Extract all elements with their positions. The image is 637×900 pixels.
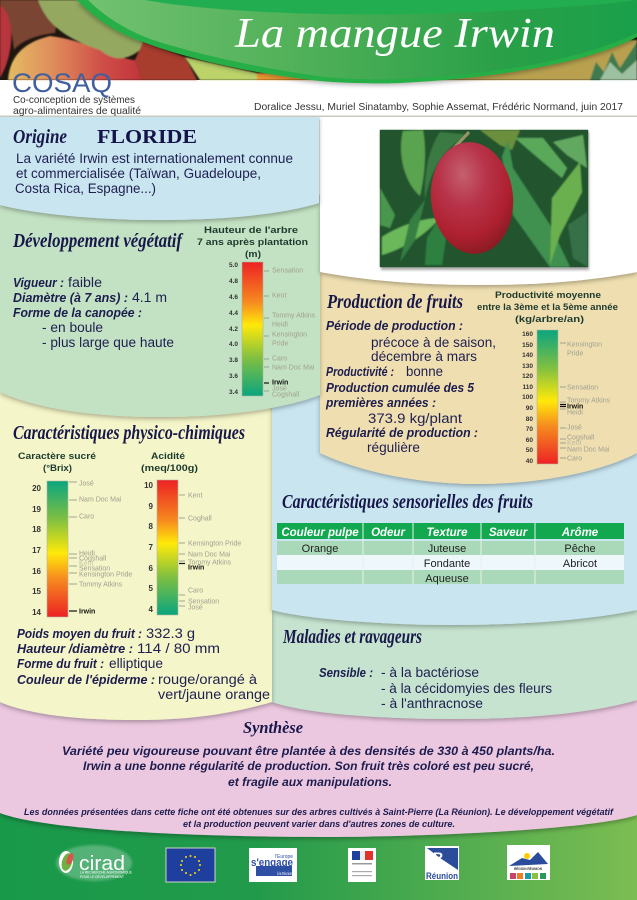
chart: hauteur de l'arbre: (m) [245, 249, 261, 260]
text: disease sensitivity: - à la cécidomyies des fleurs [381, 681, 552, 696]
chart: productivité moyenne: Pride [567, 350, 583, 358]
text: vegetative traits: Forme de la canopée : [13, 306, 142, 320]
chart: acidité: Acidité [151, 451, 185, 462]
chart: hauteur de l'arbre: Hauteur de l'arbre [204, 225, 298, 236]
chart: acidité: 8 [149, 522, 154, 531]
logo: COSAQ: COSAQ [12, 68, 112, 98]
chart: productivité moyenne: Irwin [567, 404, 583, 410]
chart: hauteur de l'arbre: 4.8 [229, 278, 238, 285]
chart: productivité moyenne: 90 [526, 405, 533, 412]
chart: productivité moyenne: Heidi [567, 410, 583, 416]
header fruit photo [0, 0, 637, 80]
chart: hauteur de l'arbre: 3.6 [229, 373, 238, 380]
chart: productivité moyenne: 150 [522, 342, 533, 349]
panel: synthèse [0, 690, 637, 837]
text: production details: bonne [406, 364, 443, 379]
chart: productivité moyenne: 70 [526, 426, 533, 433]
panel: caractéristiques physico-chimiques [0, 385, 272, 720]
chart: hauteur de l'arbre: Kent [272, 292, 286, 300]
table: sensory traits: Aqueuse [425, 573, 469, 585]
text: disease sensitivity: Sensible : [319, 666, 373, 680]
chart: productivité moyenne: Kensington [567, 342, 602, 348]
text: data note: Les données présentées dans cette fiche ont été obtenues sur des arbres cultivés à Saint-Pierre (La Réunion). Le développement végétatif [24, 807, 614, 817]
footer band [0, 790, 637, 900]
heading: Synthèse: Synthèse [243, 718, 303, 737]
panel: caractéristiques sensorielles [272, 395, 637, 625]
chart: caractère sucré: Kent [79, 560, 93, 568]
text: fruit characteristics: Poids moyen du fruit : [17, 627, 142, 641]
text: origin description: La variété Irwin est internationalement connue [16, 151, 293, 166]
chart: hauteur de l'arbre: Caro [272, 356, 287, 362]
text: production details: Productivité : [326, 365, 394, 379]
text: vegetative traits: - plus large que haute [42, 335, 174, 350]
text: production details: 373.9 kg/plant [368, 411, 462, 426]
chart: caractère sucré: Caractère sucré [18, 451, 96, 462]
text: fruit characteristics: Forme du fruit : [17, 657, 104, 671]
text: synthesis summary: Variété peu vigoureuse pouvant être plantée à des densités de 330 à 450 plants/ha. [62, 744, 555, 758]
logo: cirad: cirad [79, 853, 125, 875]
chart: caractère sucré: 16 [32, 567, 42, 576]
chart: caractère sucré: José [79, 480, 94, 488]
chart: acidité: (meq/100g) [141, 463, 198, 474]
chart: hauteur de l'arbre: Sensation [272, 268, 303, 274]
panel: photo background [320, 116, 637, 285]
chart: productivité moyenne: 80 [526, 416, 533, 423]
logo: l'Europe s'engage: l'Europe [275, 854, 293, 860]
heading: Maladies et ravageurs: Maladies et ravageurs [282, 626, 422, 648]
table: sensory traits: Pêche [564, 543, 596, 555]
chart: acidité: 10 [144, 481, 154, 490]
text: origin description [15, 151, 293, 196]
table: sensory traits: Texture [426, 527, 468, 539]
chart: hauteur de l'arbre: 3.8 [229, 357, 238, 364]
chart: productivité moyenne: 60 [526, 437, 533, 444]
chart: productivité moyenne: Tommy Atkins [567, 398, 611, 404]
logo: European Union flag [166, 848, 215, 882]
text: production details: précoce à de saison, [371, 335, 496, 350]
chart: caractère sucré: 20 [32, 484, 42, 493]
table: sensory traits [277, 523, 624, 585]
chart: productivité moyenne: Productivité moyenne [495, 290, 601, 301]
chart: productivité moyenne: Nam Doc Mai [567, 446, 610, 454]
chart: caractère sucré: Nam Doc Mai [79, 496, 122, 504]
chart: caractère sucré: 18 [32, 525, 42, 534]
table: sensory traits: Juteuse [428, 543, 466, 555]
table: sensory traits: Couleur pulpe [281, 527, 359, 539]
chart: productivité moyenne: Sensation [567, 384, 598, 392]
chart: productivité moyenne: 140 [522, 352, 533, 359]
chart: hauteur de l'arbre: Pride [272, 340, 288, 348]
chart: hauteur de l'arbre: 4.2 [229, 326, 238, 333]
text: fruit characteristics: 114 / 80 mm [137, 641, 220, 656]
chart: acidité: Kent [188, 492, 202, 500]
text: fruit characteristics: Couleur de l'épiderme : [17, 673, 155, 687]
panel: production de fruits [320, 260, 637, 484]
chart: acidité: 7 [149, 543, 154, 552]
chart: hauteur de l'arbre: 3.4 [229, 389, 238, 396]
chart: caractère sucré: Sensation [79, 566, 110, 572]
logo: cirad: POUR LE DÉVELOPPEMENT [80, 874, 125, 879]
chart: productivité moyenne: 50 [526, 447, 533, 454]
chart: caractère sucré: Heidi [79, 550, 95, 558]
heading: Développement végétatif: Développement végétatif [12, 230, 184, 252]
text: fruit characteristics: vert/jaune orange [158, 687, 270, 702]
chart: productivité moyenne: 130 [522, 363, 533, 370]
chart: hauteur de l'arbre: Irwin [272, 380, 288, 386]
text: disease sensitivity: - à l'anthracnose [381, 696, 483, 711]
text: vegetative traits: - en boule [42, 320, 103, 335]
logo: département de La Réunion [425, 846, 459, 881]
text: production details: Production cumulée des 5 [326, 381, 475, 395]
text: vegetative traits: Vigueur : [13, 276, 64, 290]
chart: caractère sucré: Irwin [79, 608, 95, 616]
chart: caractère sucré: Kensington Pride [79, 572, 132, 578]
text: fruit characteristics: rouge/orangé à [158, 672, 258, 687]
chart: caractère sucré [18, 451, 132, 617]
heading: Caractéristiques physico-chimiques: Caractéristiques physico-chimiques [13, 422, 245, 444]
chart: acidité [141, 451, 241, 615]
chart: hauteur de l'arbre: Heidi [272, 322, 288, 328]
text: fruit characteristics: Hauteur /diamètre : [17, 642, 133, 656]
chart: hauteur de l'arbre: Cogshall [272, 392, 300, 398]
text: data note: et la production peuvent varier dans d'autres zones de culture. [183, 819, 455, 829]
chart: productivité moyenne: José [567, 424, 582, 432]
text: production details [325, 319, 496, 455]
chart: caractère sucré: (°Brix) [43, 463, 72, 474]
table: sensory traits: Saveur [489, 527, 528, 539]
text: disease sensitivity: - à la bactériose [381, 665, 479, 680]
chart: productivité moyenne: Caro [567, 456, 582, 462]
chart: acidité: Caro [188, 588, 203, 594]
chart: acidité: 6 [149, 564, 154, 573]
chart: hauteur de l'arbre: Nam Doc Mai [272, 364, 315, 372]
chart: productivité moyenne: (kg/arbre/an) [515, 314, 584, 325]
text: fruit characteristics: elliptique [109, 656, 163, 671]
logo: Région Réunion [507, 845, 550, 880]
text: disease sensitivity [319, 665, 552, 711]
text: fruit characteristics [17, 626, 270, 702]
chart: caractère sucré: Cogshall [79, 556, 107, 562]
header green swoosh [77, 0, 637, 83]
text: production details: régulière [367, 440, 420, 455]
text: vegetative traits: 4.1 m [132, 290, 167, 305]
logo: République française [348, 848, 376, 882]
logo: l'Europe s'engage: s'engage [251, 857, 293, 869]
chart: caractère sucré: 14 [32, 608, 42, 617]
text: production details: Période de production : [326, 319, 463, 333]
panel: origine [0, 116, 319, 220]
chart: acidité: Kensington Pride [188, 540, 241, 548]
header [0, 0, 637, 117]
chart: caractère sucré: Tommy Atkins [79, 582, 123, 588]
chart: productivité moyenne: 110 [522, 384, 533, 391]
logo: cirad: LA RECHERCHE AGRONOMIQUE [80, 870, 133, 874]
chart: productivité moyenne: Kent [567, 440, 581, 447]
text: origin description: et commercialisée (Taïwan, Guadeloupe, [16, 166, 261, 181]
text: vegetative traits: Diamètre (à 7 ans) : [13, 291, 128, 305]
chart: caractère sucré: Caro [79, 514, 94, 520]
logo: COSAQ [12, 68, 141, 117]
chart: hauteur de l'arbre: 4.4 [229, 310, 238, 317]
text: production details: décembre à mars [371, 349, 477, 364]
chart: productivité moyenne: 40 [526, 458, 533, 465]
chart: acidité: Tommy Atkins [188, 560, 232, 566]
heading: Production de fruits: Production de fruits [326, 291, 463, 313]
logo: département de La Réunion: R [433, 849, 443, 865]
chart: acidité: Sensation [188, 598, 219, 606]
logo: l'Europe s'engage: à la Réunion [277, 871, 292, 876]
chart: hauteur de l'arbre: Kensington [272, 332, 307, 338]
text: production details: premières années : [325, 396, 436, 410]
text: origin description: Costa Rica, Espagne...) [15, 181, 156, 196]
title: La mangue Irwin [234, 11, 555, 57]
text: synthesis summary: et fragile aux manipulations. [228, 775, 392, 789]
chart: productivité moyenne [477, 290, 618, 465]
chart: productivité moyenne: 100 [522, 394, 533, 401]
heading: Origine: Origine [13, 126, 67, 148]
panel: maladies et ravageurs [272, 590, 637, 719]
chart: caractère sucré: 17 [32, 546, 42, 555]
panel: développement végétatif [0, 195, 320, 417]
heading: Caractéristiques sensorielles des fruits: Caractéristiques sensorielles des fruits [282, 491, 533, 513]
table: sensory traits: Fondante [424, 558, 470, 570]
chart: productivité moyenne: 160 [522, 331, 533, 338]
chart: acidité: José [188, 604, 203, 612]
chart: hauteur de l'arbre: 7 ans après plantation [197, 237, 308, 248]
table: sensory traits: Odeur [371, 527, 405, 539]
photo: Irwin mango on tree [380, 130, 589, 270]
chart: productivité moyenne: 120 [522, 373, 533, 380]
text: vegetative traits [13, 275, 174, 350]
chart: acidité: 9 [149, 502, 154, 511]
chart: hauteur de l'arbre: 5.0 [229, 262, 238, 269]
text: vegetative traits: faible [68, 275, 102, 290]
text: fruit characteristics: 332.3 g [146, 626, 195, 641]
chart: productivité moyenne: entre la 3ème et la 5ème année [477, 302, 618, 313]
chart: caractère sucré: 15 [32, 587, 42, 596]
logo: COSAQ: Co-conception de systèmes [13, 94, 135, 106]
table: sensory traits: Arôme [561, 527, 599, 539]
chart: hauteur de l'arbre: 4.0 [229, 341, 238, 348]
authors: Doralice Jessu, Muriel Sinatamby, Sophie Assemat, Frédéric Normand, juin 2017 [254, 102, 623, 113]
logo: département de La Réunion: Réunion [426, 871, 458, 881]
table: sensory traits: Abricot [563, 558, 597, 570]
heading: FLORIDE: FLORIDE [97, 126, 197, 148]
text: production details: Régularité de production : [326, 426, 478, 440]
chart: acidité: 4 [149, 605, 154, 614]
chart: hauteur de l'arbre [197, 225, 316, 398]
logo: cirad [56, 845, 133, 881]
chart: productivité moyenne: Cogshall [567, 434, 595, 442]
text: synthesis summary: Irwin a une bonne régularité de production. Son fruit très coloré est peu sucré, [83, 759, 534, 773]
chart: hauteur de l'arbre: José [272, 386, 287, 392]
text: synthesis summary [62, 744, 555, 789]
logo: Région Réunion: RÉGION RÉUNION [514, 866, 542, 871]
chart: acidité: 5 [149, 584, 154, 593]
chart: acidité: Coghall [188, 516, 212, 522]
chart: hauteur de l'arbre: 4.6 [229, 294, 238, 301]
chart: acidité: Nam Doc Mai [188, 552, 231, 558]
logo: l'Europe s'engage [249, 848, 297, 882]
chart: caractère sucré: 19 [32, 505, 42, 514]
logo: COSAQ: agro-alimentaires de qualité [13, 105, 141, 117]
text: data note [24, 807, 614, 829]
chart: hauteur de l'arbre: Tommy Atkins [272, 312, 316, 320]
chart: acidité: Irwin [188, 564, 204, 572]
table: sensory traits: Orange [302, 543, 338, 555]
